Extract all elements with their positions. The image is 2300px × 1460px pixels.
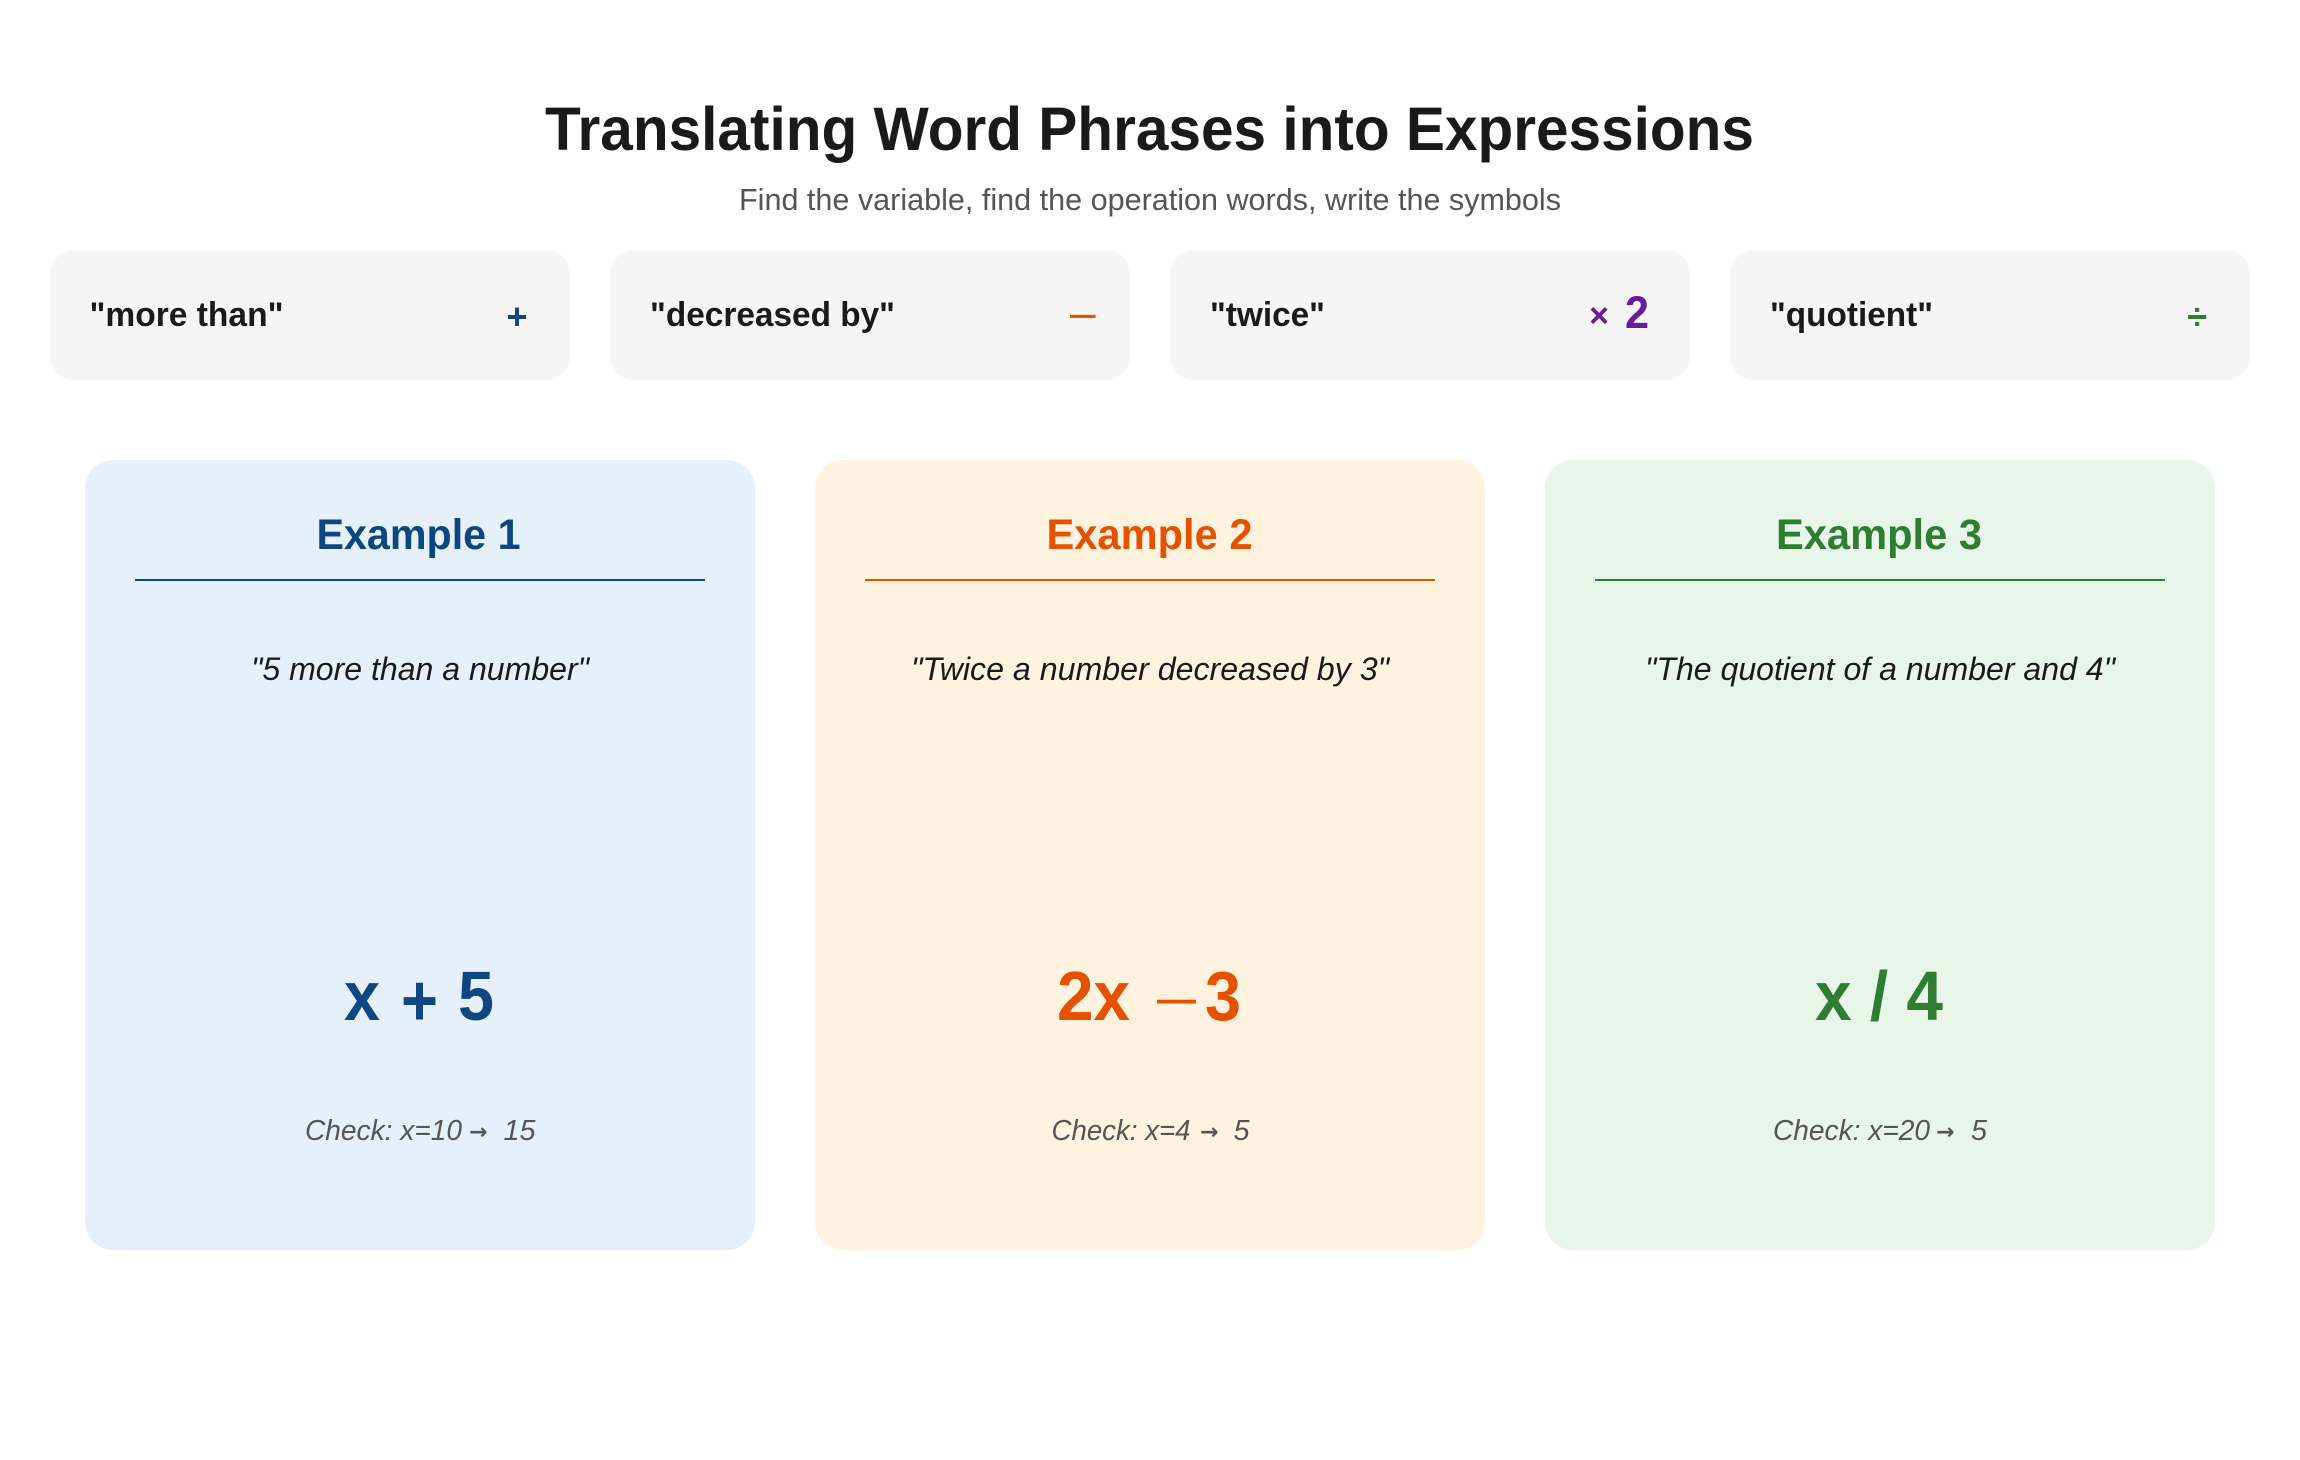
panel: example 2: 3 [1205,957,1241,1035]
panel: decreased by chip: – [1070,286,1096,338]
panel: example 2: – [1157,965,1197,1028]
panel: example 2: Example 2 [1046,511,1252,559]
panel: example 1: → [469,1120,487,1145]
panel: decreased by chip [610,250,1130,380]
panel: example 2: "Twice a number decreased by 3" [911,651,1391,687]
panel: twice chip [1170,250,1690,380]
panel: twice chip: 2 [1625,287,1649,338]
panel: example 1: "5 more than a number" [251,651,591,687]
panel: example 2 [815,460,1485,1250]
panel: example 2: Check: x=4 [1052,1115,1190,1147]
panel: example 3 [1545,460,2215,1250]
panel: example 1: 15 [504,1115,536,1147]
panel: example 3: x / 4 [1815,957,1943,1035]
panel: quotient chip [1730,250,2250,380]
panel: example 3: → [1936,1120,1954,1145]
panel: example 3: Example 3 [1776,511,1982,559]
panel: example 3: 5 [1971,1115,1987,1147]
panel: example 2: 2x [1057,957,1130,1035]
title: Translating Word Phrases into Expressions [545,95,1754,163]
panel: example 3: Check: x=20 [1773,1115,1930,1147]
panel: more than chip: "more than" [90,296,284,334]
panel: example 1: 5 [458,957,494,1035]
panel: decreased by chip: "decreased by" [650,296,895,334]
panel: quotient chip: "quotient" [1770,296,1933,334]
panel: more than chip [50,250,570,380]
panel: quotient chip: ÷ [2187,296,2207,337]
panel: twice chip: × [1589,297,1609,335]
panel: example 1: Example 1 [316,511,520,559]
panel: example 2: → [1200,1120,1218,1145]
panel: example 1: + [401,961,438,1041]
panel: twice chip: "twice" [1210,296,1325,334]
subtitle: Find the variable, find the operation words, write the symbols [739,182,1561,217]
panel: example 3: "The quotient of a number and 4" [1645,651,2117,687]
panel: more than chip: + [506,296,528,337]
panel: example 1: Check: x=10 [305,1115,462,1147]
panel: example 2: 5 [1234,1115,1250,1147]
panel: example 1: x [344,957,380,1035]
panel: example 1 [85,460,755,1250]
